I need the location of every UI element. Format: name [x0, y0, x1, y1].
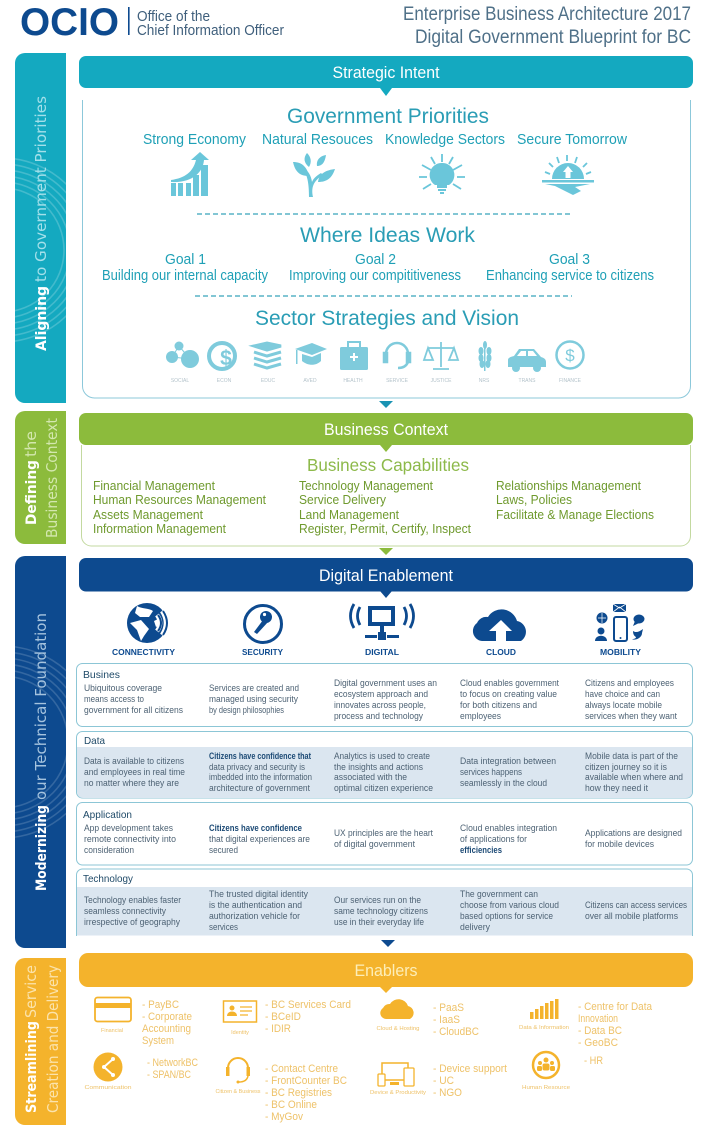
panel: data row: Mobile data is part of the	[585, 751, 678, 761]
side band: streamlining	[15, 958, 66, 1125]
priority labels: Knowledge Sectors	[385, 132, 505, 148]
panel: business context	[79, 413, 693, 546]
icon: social	[166, 342, 199, 368]
enabler: device and productivity: - NGO	[433, 1087, 462, 1099]
panel: technology row: Technology	[83, 873, 134, 885]
enabler: human resource: Human Resource	[522, 1085, 570, 1091]
enabler: data and information: Innovation	[578, 1013, 618, 1025]
panel: technology row: The trusted digital identity	[209, 889, 309, 899]
divider	[197, 213, 572, 215]
panel: business row: government for all citizens	[84, 705, 184, 715]
sector labels: EDUC	[261, 378, 275, 384]
capabilities column 1	[93, 479, 267, 536]
sector labels: FINANCE	[559, 378, 582, 384]
heading: sector strategies and vision: Sector Strategies and Vision	[255, 307, 519, 330]
goals: Goal 1	[165, 252, 206, 268]
panel: application row: Citizens have confidence	[209, 823, 302, 833]
enabler: financial	[95, 998, 192, 1047]
panel: application row: of applications for	[460, 834, 527, 844]
panel: business row: managed using security	[209, 694, 299, 704]
enabler: financial: Accounting	[142, 1023, 191, 1035]
goals: Building our internal capacity	[102, 268, 269, 284]
heading: government priorities: Government Priorities	[287, 105, 489, 128]
arrow	[379, 401, 393, 408]
side band: aligning: to Government Priorities	[32, 96, 50, 282]
sector labels: SERVICE	[386, 378, 409, 384]
priority labels: Secure Tomorrow	[517, 132, 628, 148]
panel: application row: consideration	[84, 845, 134, 855]
panel: application row: App development takes	[84, 823, 174, 833]
pillar labels	[112, 647, 641, 657]
panel: application row: UX principles are the heart	[334, 828, 434, 838]
panel: business row: means access to	[84, 694, 144, 704]
sector labels	[171, 378, 582, 384]
goals: Improving our compititiveness	[289, 268, 461, 284]
panel: application row: that digital experiences are	[209, 834, 310, 844]
heading: business capabilities: Business Capabilities	[307, 455, 469, 475]
side band: defining: Business Context	[43, 418, 61, 538]
panel: technology row: Citizens can access services	[585, 900, 688, 910]
header bar: strategic intent: Strategic Intent	[332, 64, 440, 82]
panel: application row: remote connectivity into	[84, 834, 176, 844]
panel: technology row: delivery	[460, 922, 491, 932]
enabler: citizen and business: - BC Online	[265, 1099, 317, 1111]
enabler: citizen and business: - BC Registries	[265, 1087, 332, 1099]
side band: defining: the	[22, 431, 40, 457]
panel: business row: services when they want	[585, 711, 678, 721]
capabilities column 3: Facilitate & Manage Elections	[496, 508, 654, 522]
icon: justice	[424, 342, 458, 369]
enabler: data and information: - GeoBC	[578, 1037, 618, 1049]
enabler: cloud and hosting	[376, 999, 479, 1038]
panel: business row: by design philosophies	[209, 705, 285, 715]
panel: business row: always locate mobile	[585, 700, 662, 710]
capabilities column 2	[299, 479, 472, 536]
panel: technology row	[76, 869, 692, 936]
goals: Goal 2	[355, 252, 396, 268]
enabler: citizen and business: - MyGov	[265, 1111, 303, 1123]
enabler: financial: - PayBC	[142, 999, 179, 1011]
panel: application row: Application	[83, 809, 132, 821]
header: OCIO logo: OCIO	[20, 1, 119, 44]
header: OCIO logo: Chief Information Officer	[137, 23, 284, 39]
side band: streamlining: Service	[22, 965, 40, 1018]
icon: natural resources	[478, 341, 492, 371]
panel: technology row: same technology citizens	[334, 906, 429, 916]
pillar labels: CLOUD	[486, 647, 516, 657]
panel: application row: Cloud enables integration	[460, 823, 557, 833]
header bar: business context	[79, 413, 693, 452]
panel: technology row: irrespective of geography	[84, 917, 181, 927]
panel: technology row: choose from various cloud	[460, 900, 559, 910]
enabler: identity: - BC Services Card	[265, 999, 351, 1011]
icon: health	[340, 342, 368, 370]
panel: technology row: is the authentication and	[209, 900, 302, 910]
pillar labels: MOBILITY	[600, 647, 641, 657]
panel: application row: Applications are designed	[585, 828, 682, 838]
panel: data row: the insights and actions	[334, 762, 424, 772]
enabler: data and information: - Centre for Data	[578, 1001, 653, 1013]
panel: application row: efficiencies	[460, 845, 502, 855]
capabilities column 2: Service Delivery	[299, 493, 387, 507]
panel: business row: Ubiquitous coverage	[84, 683, 162, 693]
panel: business row: for both citizens and	[460, 700, 537, 710]
sector icons	[166, 341, 584, 372]
panel: data row: available when where and	[585, 772, 683, 782]
enabler: data and information	[519, 999, 653, 1049]
enabler: device and productivity: - Device support	[433, 1063, 507, 1075]
panel: technology row: use in their everyday life	[334, 917, 424, 927]
capabilities column 3	[496, 479, 654, 522]
icon: security key	[244, 606, 282, 642]
header: OCIO logo	[20, 1, 284, 44]
pillar labels: SECURITY	[242, 647, 283, 657]
enabler: citizen and business	[216, 1058, 347, 1123]
panel: data row: citizen journey so it is	[585, 762, 668, 772]
enabler: data and information: Data & Information	[519, 1025, 569, 1031]
enabler: device and productivity	[370, 1063, 507, 1099]
enabler: citizen and business: - Contact Centre	[265, 1063, 338, 1075]
header bar: digital enablement: Digital Enablement	[319, 567, 453, 585]
panel: business row: to focus on creating value	[460, 689, 557, 699]
pillar labels: DIGITAL	[365, 647, 399, 657]
enabler: identity: - IDIR	[265, 1023, 291, 1035]
enabler: identity: - BCeID	[265, 1011, 301, 1023]
panel: business row: ecosystem approach and	[334, 689, 428, 699]
panel: business row: have choice and can	[585, 689, 660, 699]
sector labels: JUSTICE	[431, 378, 452, 384]
enabler: financial: Financial	[101, 1028, 123, 1034]
enabler: data and information: - Data BC	[578, 1025, 622, 1037]
panel: data row: Data integration between	[460, 756, 556, 766]
side band: streamlining: Creation and Delivery	[44, 965, 62, 1113]
panel: data row: Citizens have confidence that	[209, 751, 311, 761]
sector labels: ECON	[217, 378, 232, 384]
goals	[102, 252, 654, 284]
panel: technology row: Our services run on the	[334, 895, 421, 905]
panel: technology row: seamless connectivity	[84, 906, 167, 916]
panel: business row: employees	[460, 711, 502, 721]
side band: streamlining: Streamlining	[24, 1021, 40, 1113]
priority labels: Natural Resouces	[262, 132, 373, 148]
panel: business row: Digital government uses an	[334, 678, 437, 688]
panel: data row: Analytics is used to create	[334, 751, 430, 761]
capabilities column 2: Land Management	[299, 508, 399, 522]
panel: application row: for mobile devices	[585, 839, 655, 849]
enabler: cloud and hosting: - CloudBC	[433, 1026, 479, 1038]
pillar labels: CONNECTIVITY	[112, 647, 175, 657]
sector labels: HEALTH	[343, 378, 363, 384]
enabler: communication: Communication	[84, 1085, 132, 1091]
goals: Goal 3	[549, 252, 590, 268]
header bar: business context: Business Context	[324, 421, 448, 439]
header: OCIO logo: Office of the	[137, 9, 210, 25]
icon: finance	[556, 342, 584, 368]
enabler: communication: - SPAN/BC	[147, 1069, 191, 1081]
icon: plant	[293, 153, 335, 197]
panel: data row: architecture of government	[209, 783, 311, 793]
enabler: cloud and hosting: Cloud & Hosting	[376, 1026, 420, 1032]
icon: education	[254, 343, 281, 368]
side band: modernizing: Modernizing	[34, 805, 50, 891]
enabler: citizen and business: - FrontCounter BC	[265, 1075, 347, 1087]
panel: data row: Data is available to citizens	[84, 756, 185, 766]
capabilities column 1: Human Resources Management	[93, 493, 267, 507]
header bar: digital enablement	[79, 558, 693, 598]
icon: mobility	[595, 604, 644, 641]
icon: digital network	[350, 604, 414, 640]
panel: strategic intent	[79, 56, 693, 398]
panel: data row: how they need it	[585, 783, 649, 793]
panel: business row: Cloud enables government	[460, 678, 560, 688]
capabilities column 2: Register, Permit, Certify, Inspect	[299, 522, 472, 536]
enabler: communication	[84, 1052, 198, 1091]
sector labels: SOCIAL	[171, 378, 189, 384]
enabler: citizen and business: Citizen & Business	[216, 1089, 261, 1095]
panel: business row: Services are created and	[209, 683, 299, 693]
icon: transport	[508, 349, 546, 372]
panel: business row	[76, 664, 692, 726]
side band: aligning: Aligning	[34, 286, 50, 351]
icon: service	[384, 343, 410, 368]
enabler: identity: Identity	[231, 1030, 249, 1036]
arrow	[379, 548, 393, 555]
icon: sunrise road	[542, 155, 594, 195]
side band: aligning	[15, 53, 66, 403]
panel: data row: optimal citizen experience	[334, 783, 433, 793]
priority labels: Strong Economy	[143, 132, 247, 148]
enabler: communication: - NetworkBC	[147, 1057, 198, 1069]
icon: connectivity globe	[127, 603, 167, 643]
sector labels: NRS	[479, 378, 490, 384]
panel: business row: process and technology	[334, 711, 424, 721]
side band: defining	[15, 411, 66, 544]
side band: modernizing: our Technical Foundation	[32, 613, 50, 800]
panel: data row: associated with the	[334, 772, 407, 782]
panel: data row	[76, 732, 692, 798]
icon: light bulb	[419, 154, 465, 194]
enabler: cloud and hosting: - PaaS	[433, 1002, 464, 1014]
panel: business row: Busines	[83, 669, 120, 681]
priority labels	[143, 132, 628, 148]
icon: finance: $	[565, 346, 575, 365]
icon: advanced education	[295, 343, 327, 365]
side band: defining: Defining	[24, 460, 40, 525]
panel: data row: and employees in real time	[84, 767, 185, 777]
panel: business row: Citizens and employees	[585, 678, 675, 688]
enabler: device and productivity: - UC	[433, 1075, 454, 1087]
enabler: human resource: - HR	[584, 1055, 603, 1067]
panel: technology row: services	[209, 922, 239, 932]
capabilities column 2: Technology Management	[299, 479, 433, 493]
panel: data row: services happens	[460, 767, 523, 777]
panel: data row: seamlessly in the cloud	[460, 778, 547, 788]
panel: technology row: The government can	[460, 889, 538, 899]
enabler: device and productivity: Device & Productivity	[370, 1090, 426, 1096]
panel: application row: of digital government	[334, 839, 416, 849]
goals: Enhancing service to citizens	[486, 268, 654, 284]
enabler: financial: - Corporate	[142, 1011, 192, 1023]
panel: technology row: over all mobile platforms	[585, 911, 679, 921]
arrow	[381, 940, 395, 947]
capabilities column 1: Financial Management	[93, 479, 215, 493]
capabilities column 3: Laws, Policies	[496, 493, 572, 507]
panel: technology row: based options for service	[460, 911, 553, 921]
header bar: strategic intent	[79, 56, 693, 96]
icon: cloud upload	[473, 609, 526, 642]
sector labels: AVED	[303, 378, 317, 384]
enabler: identity	[224, 999, 351, 1036]
panel: data row: no matter where they are	[84, 778, 179, 788]
header: document title	[403, 4, 691, 48]
panel: data row: Data	[84, 735, 105, 747]
divider	[195, 295, 572, 297]
panel: data row: data privacy and security is	[209, 762, 306, 772]
capabilities column 1: Assets Management	[93, 508, 204, 522]
panel: technology row: authorization vehicle for	[209, 911, 300, 921]
panel: technology row: Technology enables faster	[84, 895, 181, 905]
enabler: cloud and hosting: - IaaS	[433, 1014, 460, 1026]
enabler: human resource	[522, 1052, 603, 1091]
icon: growth chart	[171, 152, 209, 196]
panel: business row: innovates across people,	[334, 700, 426, 710]
capabilities column 3: Relationships Management	[496, 479, 641, 493]
panel: application row	[76, 802, 692, 865]
icon: economy: $	[220, 347, 232, 370]
side band: modernizing	[15, 556, 66, 948]
capabilities column 1: Information Management	[93, 522, 227, 536]
header bar: enablers	[79, 953, 693, 993]
heading: where ideas work: Where Ideas Work	[300, 224, 475, 247]
header bar: enablers: Enablers	[354, 961, 418, 980]
panel: data row: imbedded into the information	[209, 772, 312, 782]
panel: application row: secured	[209, 845, 238, 855]
enabler: financial: System	[142, 1035, 174, 1047]
icon: economy	[209, 343, 235, 370]
sector labels: TRANS	[519, 378, 536, 384]
